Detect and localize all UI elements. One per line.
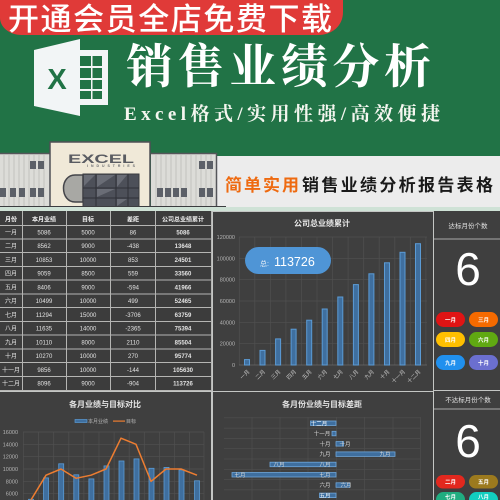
month pills: 二月 [445,479,456,486]
table rows: 8500 [81,272,95,278]
axis month labels [311,419,331,499]
callout: total [245,247,331,274]
panel: monthly gap to target [213,392,433,500]
illustration: factory building [0,142,226,208]
table rows: 15000 [80,313,97,319]
axis month labels: 十一月 [314,430,330,438]
legend: 本月业绩 [88,418,108,425]
icon: excel logo [34,39,108,116]
illustration: factory building: INDUSTRIES [87,164,136,168]
y axis labels: 80000 [220,278,235,284]
table rows: 5000 [81,230,95,236]
table rows: 11635 [36,327,53,333]
table rows: 9000 [81,244,95,250]
bar chart: monthly sales [28,459,200,500]
month pills: 三月 [478,317,489,324]
panel: months below target [434,391,500,500]
line chart: target [31,438,197,500]
month pills: 五月 [478,479,489,486]
table rows: 499 [128,299,139,305]
table header: 目标 [82,216,94,224]
x axis labels: 十一月 [390,368,407,385]
table rows: 5086 [37,230,51,236]
legend: 目标 [126,418,136,425]
table rows: 86 [130,230,137,236]
subtitle: Excel格式/实用性强/高效便捷 [124,102,440,125]
y axis labels: 120000 [217,235,235,241]
bar end labels: 六月 [340,481,352,489]
table rows: 五月 [5,284,17,291]
y axis labels: 40000 [220,320,235,326]
promo badge: 开通会员全店免费下载 [8,2,332,37]
table rows: 九月 [5,338,17,346]
bar end labels: 十月 [339,440,351,448]
table rows: 559 [128,272,139,278]
table rows: -438 [127,244,140,250]
table rows: -3706 [125,313,141,319]
y axis labels [217,235,235,369]
x axis labels: 十二月 [405,368,422,385]
table header: 月份 [5,216,17,224]
y axis labels: 10000 [3,467,18,473]
callout: total: 总: [260,259,269,268]
x axis labels: 三月 [270,368,282,381]
legend [75,418,136,425]
x axis labels: 一月 [239,368,251,381]
axis month labels: 六月 [319,481,331,489]
table rows: 13648 [175,244,192,250]
axis month labels: 十二月 [311,419,327,427]
table rows: 十月 [5,352,17,360]
bar end labels: 七月 [234,471,246,479]
table rows: 9000 [81,382,95,388]
y axis labels: 8000 [6,479,18,485]
panel: data table [0,211,212,391]
table rows: 10000 [80,299,97,305]
table rows: 三月 [5,257,17,264]
table rows: 5086 [176,230,190,236]
panel: months on target: 达标月份个数 [448,221,488,230]
table rows: 95774 [175,354,192,360]
table rows: 853 [128,258,139,264]
y axis labels: 6000 [6,492,18,498]
table rows: 75394 [175,327,192,333]
table header: 本月业绩 [32,216,56,224]
slogan strip: 简单实用 [225,175,299,195]
y axis labels [3,430,18,498]
y axis labels: 12000 [3,455,18,461]
axis month labels: 八月 [319,462,331,468]
table rows: 十一月 [2,366,20,374]
table rows: 8562 [37,244,51,250]
table rows: 8406 [37,285,51,291]
axis month labels: 五月 [319,492,331,499]
y axis labels: 60000 [220,299,235,305]
separator strip [0,207,500,211]
table rows: 52465 [175,299,192,305]
x axis labels: 四月 [285,368,298,381]
table rows: 14000 [80,327,97,333]
title: 销售业绩分析 [126,42,431,94]
bar chart: cumulative bars [244,244,420,365]
table rows: 24501 [175,258,192,264]
table rows: 270 [128,354,139,360]
table rows: -144 [127,368,140,374]
y axis labels: 100000 [217,256,235,262]
table header [5,216,204,224]
month pills: 一月 [445,317,456,324]
table rows: 10000 [80,354,97,360]
table header: 公司总业绩累计 [162,216,204,224]
table rows: -2365 [125,327,141,333]
icon: excel logo: X [47,64,67,96]
table rows: 10000 [80,368,97,374]
table rows: 一月 [5,230,17,236]
chart title: 公司总业绩累计 [294,218,350,228]
month pills: 四月 [445,337,456,344]
month pills: 六月 [478,336,489,344]
month pills [436,475,498,500]
table rows: 八月 [5,326,17,333]
table rows: 105630 [173,368,194,374]
table rows: -904 [127,382,140,388]
table rows: -594 [127,285,140,291]
axis month labels: 九月 [319,450,331,458]
panel: cumulative sales chart [213,212,433,391]
y axis labels: 20000 [220,342,235,348]
table rows: 9059 [37,272,51,278]
bar end labels: 八月 [273,462,285,468]
table rows: 七月 [5,311,17,319]
table rows: 9000 [81,285,95,291]
x axis labels: 十月 [378,368,391,381]
x axis labels: 二月 [254,368,267,381]
table rows: 2110 [127,340,140,346]
x axis labels: 九月 [362,368,376,381]
x axis labels: 八月 [348,368,360,381]
panel: months below target: 不达标月份个数 [445,395,491,404]
slogan strip [217,156,500,207]
slogan strip: 销售业绩分析报告表格 [302,175,493,195]
x axis labels [239,368,422,385]
panel: months on target [434,211,500,390]
chart title: 各月份业绩与目标差距 [282,399,362,409]
table rows: 9856 [37,368,51,374]
month pills: 十月 [478,359,489,367]
table rows: 113726 [173,382,194,388]
table rows: 63759 [175,313,192,319]
table rows: 10499 [36,299,53,305]
table rows: 11294 [36,313,53,319]
table rows: 10853 [36,258,53,264]
table rows: 33560 [175,272,192,278]
axis month labels: 七月 [319,471,331,479]
y axis labels: 16000 [3,430,18,436]
table rows: 二月 [5,243,17,250]
illustration: factory building: EXCEL [68,152,134,166]
x axis labels: 五月 [301,368,314,381]
chart title: 各月业绩与目标对比 [69,399,141,409]
table rows: 85504 [175,340,192,346]
x axis labels: 六月 [316,368,329,381]
table rows: 10110 [36,340,53,346]
axis month labels: 十月 [319,440,331,448]
table rows [2,230,194,388]
panel: monthly sales vs target [0,392,211,500]
callout: total: 113726 [274,255,315,269]
table rows: 8000 [81,340,95,346]
table rows: 10000 [80,258,97,264]
y axis labels: 0 [232,363,235,369]
table rows: 8096 [37,382,51,388]
table rows: 十二月 [2,380,20,388]
y axis labels: 14000 [3,442,18,448]
table rows: 四月 [5,271,17,278]
bar chart: gap bars [232,421,395,498]
table rows: 六月 [5,297,17,305]
table rows: 10270 [36,354,53,360]
big number: 6 [455,415,481,467]
bar end labels [234,440,391,489]
x axis labels: 七月 [331,368,345,381]
banner background [0,0,500,209]
month pills: 九月 [445,359,456,367]
month pills [436,312,498,370]
bar end labels: 九月 [379,450,391,458]
table header: 差距 [127,216,139,224]
table rows: 41966 [175,285,192,291]
big number: 6 [455,243,481,295]
